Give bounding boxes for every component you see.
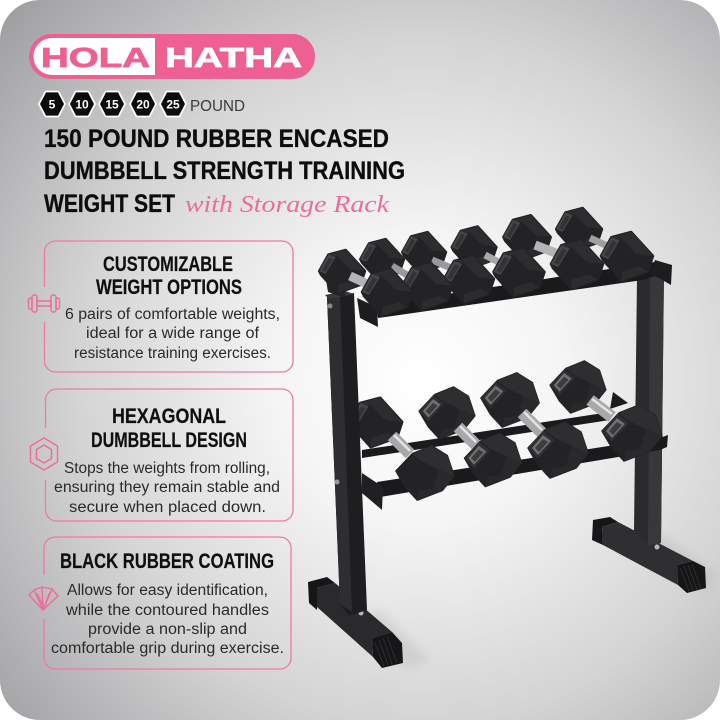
dumbbell 2 [419, 387, 522, 487]
rack: lower shelf front bar [362, 435, 668, 510]
bottom row dumbbells [392, 361, 662, 500]
panel: customizable weight options: ideal for a wide range of [86, 325, 260, 342]
logo word: HATHA: HATHA [165, 42, 302, 73]
dumbbell 1 [392, 435, 454, 500]
panel: customizable weight options [28, 241, 293, 372]
panel: customizable weight options: CUSTOMIZABLE [103, 253, 233, 276]
product: dumbbell rack [308, 208, 715, 668]
dumbbell 2 [360, 239, 452, 310]
rack: right base foot [592, 517, 706, 593]
weight badges: 20 [136, 98, 150, 112]
panel: customizable weight options: resistance training exercises. [74, 345, 271, 362]
dumbbell 3 [481, 373, 588, 478]
panel: black rubber coating: while the contoured handles [65, 602, 269, 619]
dumbbell 6 [556, 208, 653, 281]
panel: customizable weight options: WEIGHT OPTIONS [96, 276, 242, 299]
icon: dumbbell [28, 295, 60, 312]
title: DUMBBELL STRENGTH TRAINING [44, 157, 405, 185]
panel: hexagonal dumbbell design [30, 389, 293, 521]
weight badges: 10 [75, 98, 89, 112]
panel: hexagonal dumbbell design: HEXAGONAL [112, 405, 226, 428]
dumbbell 5 [503, 215, 603, 289]
title: 150 POUND RUBBER ENCASED [44, 125, 389, 153]
title: WEIGHT SET [44, 190, 175, 218]
dumbbell 3 [402, 232, 494, 303]
rack: right upright [634, 271, 664, 546]
top row dumbbells [319, 208, 653, 316]
panel: black rubber coating: Allows for easy identification, [67, 582, 268, 599]
unit label: POUND [190, 98, 245, 115]
rack: left upright [325, 291, 367, 616]
dumbbell head behind left upright [350, 398, 402, 447]
weight badges: 5 [49, 98, 56, 112]
panel: hexagonal dumbbell design: DUMBBELL DESIGN [91, 429, 247, 452]
panel: customizable weight options: 6 pairs of comfortable weights, [65, 306, 280, 323]
rack: top shelf [326, 260, 672, 327]
weight badges [39, 92, 245, 116]
rack: lower shelf back bar [362, 392, 628, 458]
icon: colour swatch fan [29, 587, 58, 610]
panel: black rubber coating [29, 537, 291, 669]
rack: left base foot [308, 577, 403, 668]
weight badges: 15 [105, 98, 119, 112]
floor shadows [345, 535, 715, 668]
dumbbell 4 [452, 226, 544, 296]
script subtitle: with Storage Rack [185, 192, 389, 218]
brand logo [29, 34, 315, 79]
panel: black rubber coating: comfortable grip during exercise. [51, 640, 284, 657]
dumbbell 1 [319, 250, 412, 316]
weight badges: 25 [166, 98, 180, 112]
dumbbell 4 [550, 361, 662, 461]
logo word: HOLA: HOLA [41, 42, 150, 73]
panel: hexagonal dumbbell design: Stops the weights from rolling, [64, 460, 270, 477]
panel: hexagonal dumbbell design: secure when placed down. [69, 499, 266, 516]
panel: black rubber coating: BLACK RUBBER COATING [60, 550, 274, 573]
title [44, 125, 405, 218]
panel: hexagonal dumbbell design: ensuring they remain stable and [54, 479, 280, 496]
panel: black rubber coating: provide a non-slip and [88, 621, 247, 638]
icon: hexagon [30, 438, 58, 470]
